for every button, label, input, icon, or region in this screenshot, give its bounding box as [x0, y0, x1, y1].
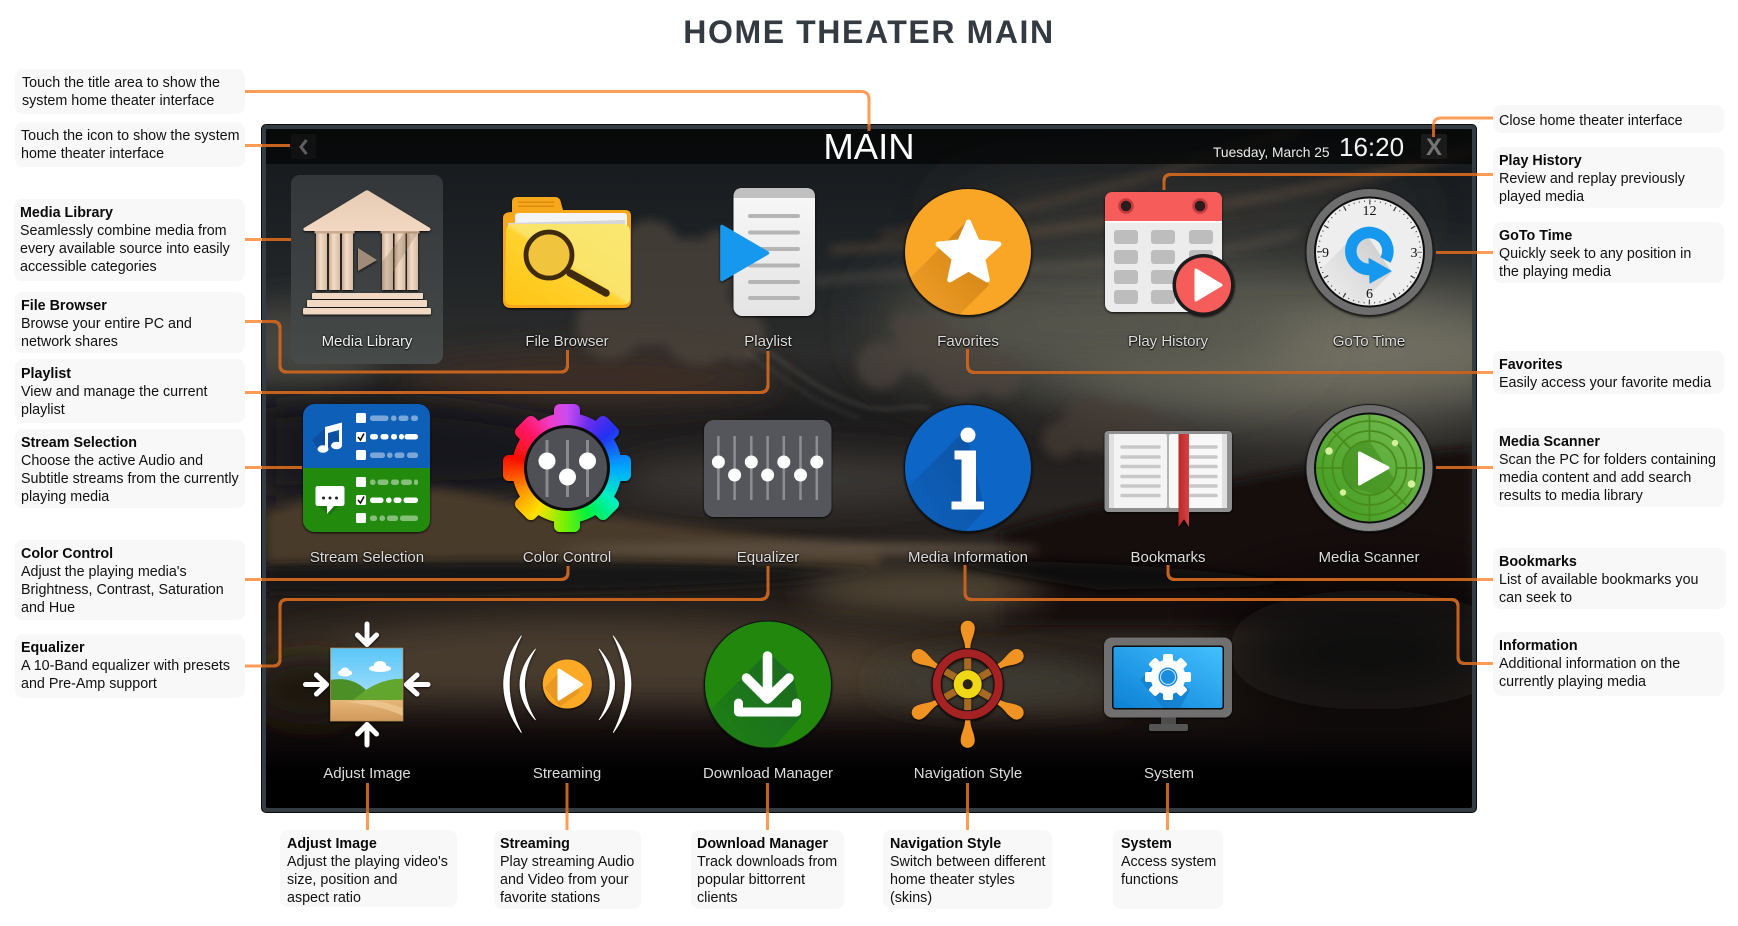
label: Stream Selection: Stream Selection — [310, 548, 424, 566]
icon: adjust image — [306, 624, 428, 745]
label: System: System — [1144, 764, 1194, 782]
callout: title area: Touch the title area to show the — [22, 75, 220, 91]
label: Download Manager: Download Manager — [703, 764, 833, 782]
icon: system — [1104, 638, 1232, 731]
connector: favorites — [968, 349, 1493, 372]
callout: Media Library — [14, 199, 245, 281]
callout: Favorites: Favorites — [1499, 357, 1563, 373]
icon: file browser — [503, 197, 631, 308]
callout: Adjust Image: size, position and — [287, 872, 397, 888]
connector: download manager — [766, 783, 769, 830]
callout: Download Manager: popular bittorrent — [697, 872, 805, 888]
callout: Bookmarks: Bookmarks — [1499, 554, 1577, 570]
panel: home theater screen — [261, 124, 1477, 813]
icon: playlist — [722, 188, 815, 316]
callout: Media Scanner: media content and add search — [1499, 470, 1691, 486]
icon: navigation style — [909, 621, 1026, 748]
callout: Media Library: Media Library — [20, 205, 113, 221]
icon: media library tile — [291, 175, 443, 364]
connector: title area — [245, 92, 869, 131]
callout: GoTo Time: GoTo Time — [1499, 228, 1572, 244]
connector: back icon — [245, 144, 290, 147]
callout: close: Close home theater interface — [1499, 113, 1683, 129]
icon: bookmarks — [1104, 431, 1232, 527]
callout: Adjust Image: Adjust Image — [287, 836, 377, 852]
callout: Bookmarks — [1493, 548, 1726, 609]
label: Streaming: Streaming — [533, 764, 601, 782]
callout: System: functions — [1121, 872, 1178, 888]
label: Playlist: Playlist — [744, 332, 792, 350]
callout: Stream Selection: Choose the active Audio and — [21, 453, 203, 469]
connector: navigation style — [966, 783, 969, 830]
callout: Information: currently playing media — [1499, 674, 1646, 690]
callout: Media Scanner: Media Scanner — [1499, 434, 1600, 450]
connector: color control — [245, 566, 568, 580]
callout: Media Scanner — [1493, 428, 1724, 507]
icon: media information — [903, 404, 1033, 534]
connector: playlist — [245, 351, 768, 392]
callout: Color Control: and Hue — [21, 600, 75, 616]
icon: goto time: 12 — [1362, 204, 1376, 219]
connector: information — [965, 565, 1493, 664]
callout: back icon: Touch the icon to show the system — [21, 128, 240, 144]
callout: File Browser — [15, 292, 245, 353]
label: Play History: Play History — [1128, 332, 1208, 350]
connector: equalizer — [245, 566, 768, 666]
close button — [1421, 134, 1447, 159]
connector lines — [245, 90, 1493, 830]
callout: title area — [15, 69, 245, 114]
connector: goto time — [1436, 251, 1493, 254]
callout: Media Scanner: results to media library — [1499, 488, 1643, 504]
close button: X — [1426, 134, 1442, 161]
callout: Playlist: playlist — [21, 402, 65, 418]
callout: Playlist — [15, 359, 245, 423]
callout: close — [1493, 105, 1724, 133]
callout: Media Scanner: Scan the PC for folders containing — [1499, 452, 1716, 468]
callout: Playlist: View and manage the current — [21, 384, 208, 400]
callout: back icon: home theater interface — [21, 146, 164, 162]
label: Media Information: Media Information — [908, 548, 1028, 566]
callout: Play History — [1493, 147, 1724, 208]
callout: GoTo Time — [1493, 222, 1724, 283]
clock: 16:20 — [1339, 132, 1404, 162]
callout: Stream Selection — [15, 429, 245, 508]
icon: equalizer — [704, 420, 832, 517]
back button — [291, 134, 316, 159]
icon: play history — [1105, 192, 1234, 316]
callout: Navigation Style: (skins) — [890, 890, 932, 906]
wallpaper and icons — [266, 129, 1472, 808]
callout: Stream Selection: Subtitle streams from the currently — [21, 471, 239, 487]
callout: Download Manager: Track downloads from — [697, 854, 837, 870]
label: Media Library: Media Library — [322, 332, 412, 350]
connector: play history — [1164, 174, 1493, 190]
callout: GoTo Time: Quickly seek to any position in — [1499, 246, 1691, 262]
icon: goto time — [1306, 188, 1433, 320]
icon: favorites — [903, 188, 1033, 318]
label: Adjust Image: Adjust Image — [323, 764, 411, 782]
callout: Color Control: Brightness, Contrast, Saturation — [21, 582, 224, 598]
icon: media scanner — [1306, 404, 1433, 532]
callout: Download Manager: Download Manager — [697, 836, 828, 852]
icon: download manager — [702, 620, 834, 748]
icon: streaming — [504, 636, 631, 733]
callout: Information: Information — [1499, 638, 1578, 654]
callout: Play History: Review and replay previously — [1499, 171, 1685, 187]
callout: Equalizer: Equalizer — [21, 640, 85, 656]
top bar — [266, 129, 1472, 164]
callout: back icon — [15, 122, 245, 167]
label: Equalizer: Equalizer — [737, 548, 799, 566]
callout: Equalizer: A 10-Band equalizer with presets — [21, 658, 230, 674]
title: HOME THEATER MAIN — [683, 14, 1055, 50]
callout: Play History: played media — [1499, 189, 1584, 205]
label: GoTo Time: GoTo Time — [1333, 332, 1405, 350]
icon: goto time: 9 — [1322, 246, 1329, 261]
callout: Streaming: Streaming — [500, 836, 570, 852]
callout: Stream Selection: Stream Selection — [21, 435, 137, 451]
callout: Play History: Play History — [1499, 153, 1582, 169]
callout: Streaming: Play streaming Audio — [500, 854, 634, 870]
connector: stream selection — [245, 466, 302, 469]
callout: System: System — [1121, 836, 1172, 852]
callout: File Browser: File Browser — [21, 298, 107, 314]
label: Media Scanner: Media Scanner — [1319, 548, 1419, 566]
callout: Equalizer: and Pre-Amp support — [21, 676, 157, 692]
connector: file browser — [245, 322, 568, 372]
connector: adjust image — [366, 783, 369, 830]
connector: media library — [245, 238, 291, 241]
callout: File Browser: Browse your entire PC and — [21, 316, 192, 332]
icon: stream selection — [303, 404, 430, 532]
speech bubble — [316, 486, 344, 514]
callout: Color Control: Color Control — [21, 546, 113, 562]
callout: Information — [1493, 632, 1724, 696]
callout: Bookmarks: can seek to — [1499, 590, 1572, 606]
callout: Equalizer — [15, 634, 245, 698]
callout: Navigation Style: Navigation Style — [890, 836, 1001, 852]
screen title: MAIN: MAIN — [823, 126, 915, 167]
callout: Playlist: Playlist — [21, 366, 71, 382]
callout: GoTo Time: the playing media — [1499, 264, 1611, 280]
icon: goto time: 3 — [1410, 246, 1418, 261]
callout: Bookmarks: List of available bookmarks you — [1499, 572, 1698, 588]
music note — [318, 422, 342, 453]
connector: bookmarks — [1168, 565, 1493, 580]
callout: Streaming: favorite stations — [500, 890, 600, 906]
wallpaper — [266, 129, 1472, 808]
connector: close button — [1434, 118, 1493, 137]
callout: Stream Selection: playing media — [21, 489, 109, 505]
callout: Navigation Style: home theater styles — [890, 872, 1015, 888]
date: Tuesday, March 25 — [1213, 145, 1330, 160]
callout: Streaming — [494, 830, 641, 909]
callout: Color Control: Adjust the playing media's — [21, 564, 187, 580]
callout: Adjust Image — [280, 830, 457, 907]
callout: title area: system home theater interface — [22, 93, 214, 109]
label: Bookmarks: Bookmarks — [1130, 548, 1206, 566]
callout: Information: Additional information on the — [1499, 656, 1680, 672]
callout: Favorites: Easily access your favorite media — [1499, 375, 1711, 391]
callout: System — [1113, 830, 1223, 909]
connector: media scanner — [1436, 466, 1493, 469]
callout: Media Library: Seamlessly combine media from — [20, 223, 227, 239]
label: Color Control: Color Control — [523, 548, 611, 566]
label: Navigation Style: Navigation Style — [914, 764, 1022, 782]
connector: system — [1166, 783, 1169, 830]
callout: System: Access system — [1121, 854, 1216, 870]
icon: goto time: 6 — [1366, 287, 1373, 302]
callout: Adjust Image: aspect ratio — [287, 890, 361, 906]
callout: Color Control — [15, 540, 245, 620]
callout: Adjust Image: Adjust the playing video's — [287, 854, 448, 870]
callout: Media Library: accessible categories — [20, 259, 157, 275]
callout: Navigation Style: Switch between different — [890, 854, 1046, 870]
callout: Navigation Style — [883, 830, 1052, 909]
callout: Media Library: every available source into easily — [20, 241, 230, 257]
callout: Download Manager — [691, 830, 844, 909]
callout: Download Manager: clients — [697, 890, 738, 906]
label: File Browser: File Browser — [525, 332, 609, 350]
label: Favorites: Favorites — [937, 332, 999, 350]
connector: streaming — [566, 783, 568, 830]
callout: File Browser: network shares — [21, 334, 118, 350]
callout: Favorites — [1493, 351, 1724, 394]
icon: color control — [503, 404, 631, 532]
callout: Streaming: and Video from your — [500, 872, 628, 888]
